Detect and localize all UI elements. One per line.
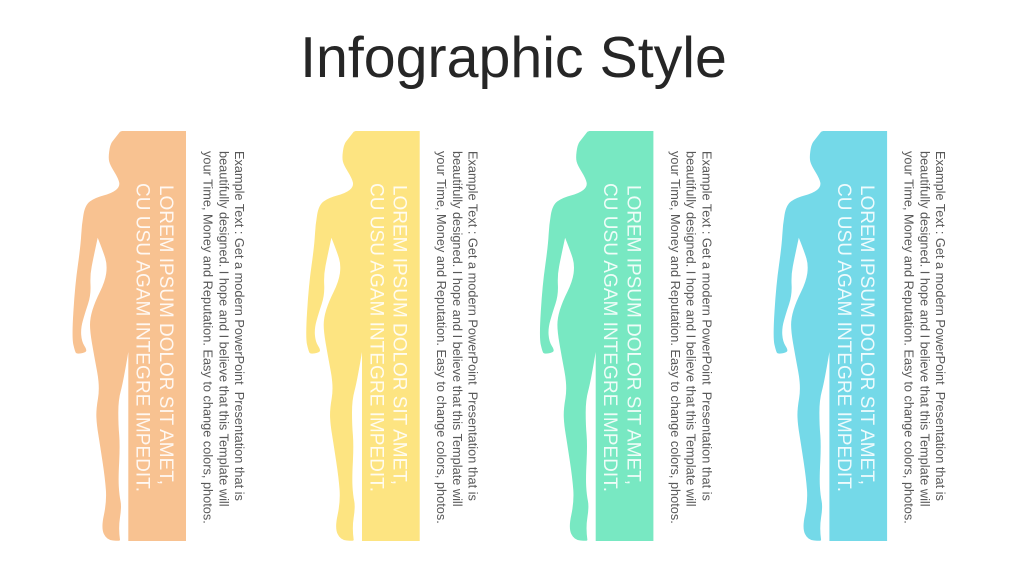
panel: yellow figure	[306, 131, 481, 541]
title: Infographic Style	[300, 26, 727, 90]
panel: green figure	[540, 131, 714, 541]
panel: orange figure	[73, 131, 247, 541]
panel: blue figure	[774, 131, 948, 541]
